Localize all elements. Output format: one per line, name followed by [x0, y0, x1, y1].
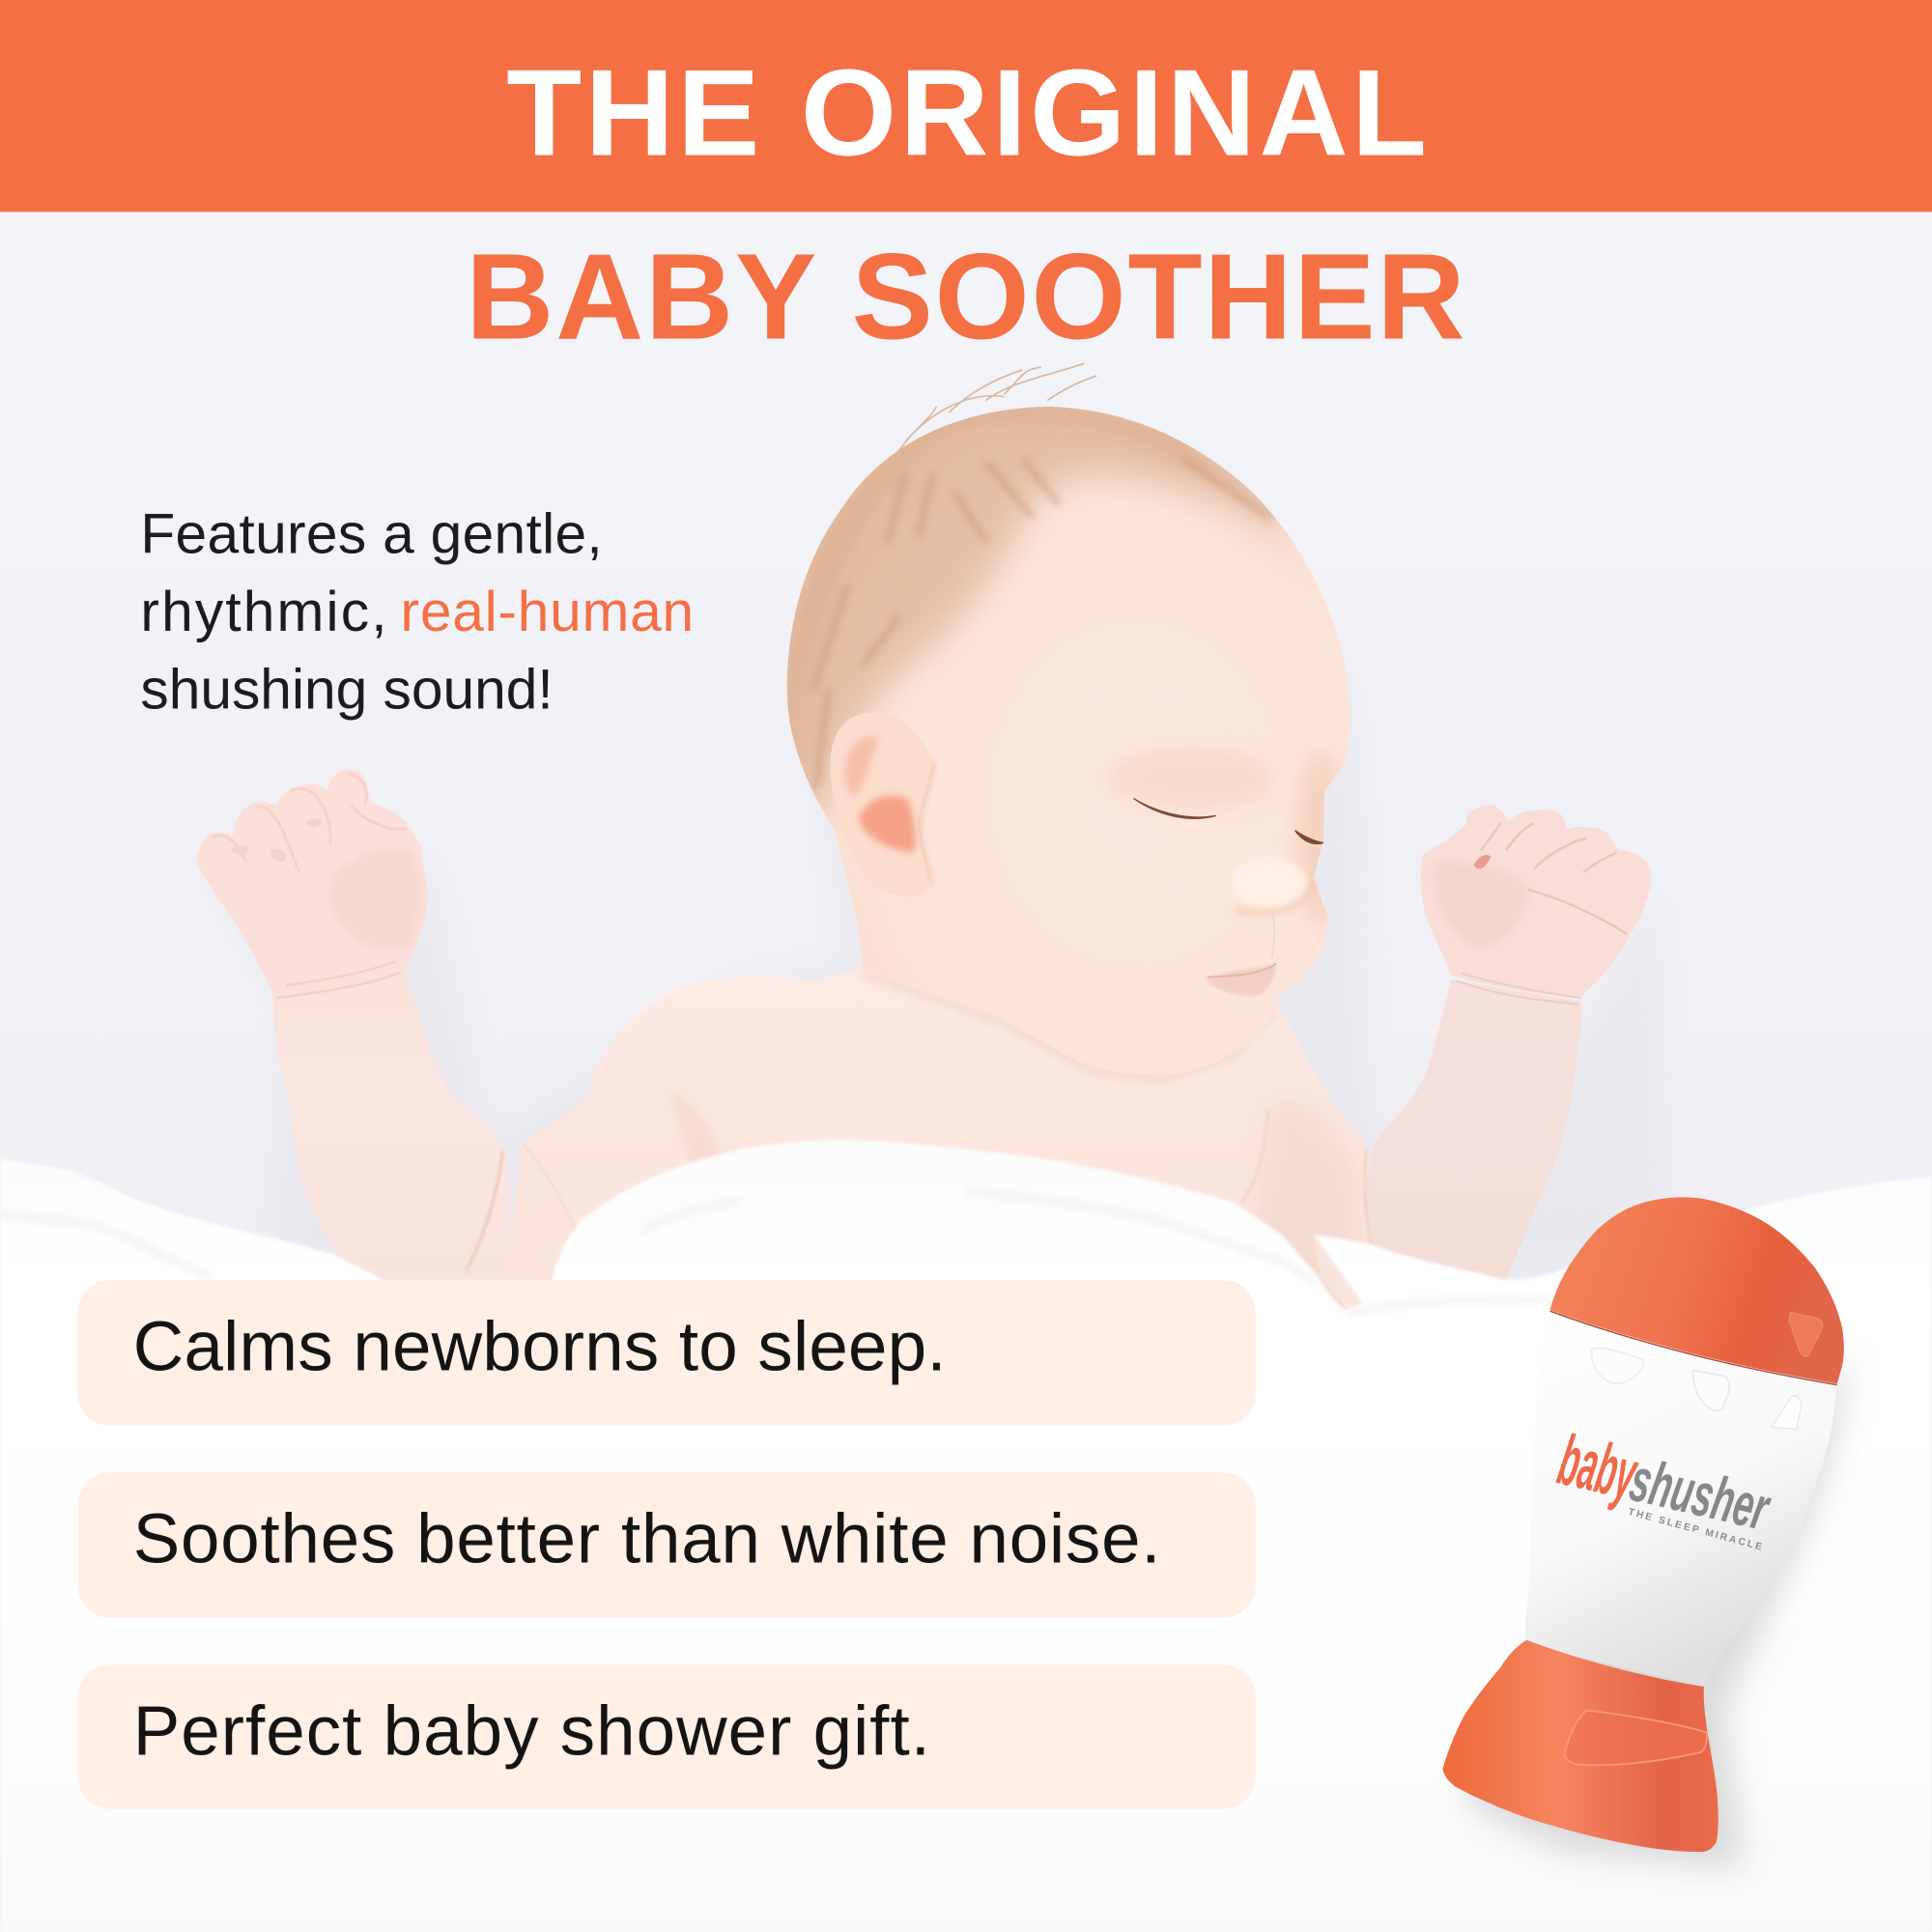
chest and arm crease — [1240, 1112, 1267, 1204]
benefit pill 3 — [77, 1664, 1256, 1808]
head — [770, 363, 1350, 1074]
pill background — [77, 1472, 1256, 1618]
device logo — [1551, 1419, 1779, 1546]
nose highlight — [1233, 858, 1306, 907]
callout line two: rhythmic, — [140, 581, 387, 643]
pill text: Perfect baby shower gift. — [133, 1691, 930, 1770]
eye socket shading — [1105, 747, 1273, 810]
white sheet and blanket — [0, 1140, 1932, 1932]
underarm crease — [670, 1091, 720, 1168]
product drop shadow — [1466, 1355, 1848, 1868]
ear — [831, 713, 933, 897]
dome seam — [1550, 1311, 1837, 1385]
left arm — [272, 971, 510, 1288]
logo tagline: THE SLEEP MIRACLE — [1627, 1507, 1763, 1553]
closed eye left — [1133, 799, 1216, 818]
darker hair streaks — [813, 458, 1269, 788]
ear shadow — [918, 761, 933, 885]
right cheek shading — [1296, 752, 1346, 924]
nose shadow — [1235, 882, 1316, 913]
right shoulder shading — [1244, 1102, 1361, 1319]
benefit pill 1 — [77, 1280, 1256, 1426]
lip line — [1208, 963, 1276, 977]
callout line one: Features a gentle, — [140, 503, 603, 566]
elbow crease — [466, 1151, 502, 1271]
hair wisps — [899, 363, 1096, 450]
pill background — [77, 1664, 1256, 1808]
mouth — [1205, 963, 1276, 996]
right arm crease — [1365, 1149, 1372, 1244]
control button left — [1592, 1349, 1644, 1383]
control button right — [1772, 1396, 1802, 1430]
left hand — [197, 770, 428, 998]
pill text: Calms newborns to sleep. — [133, 1307, 947, 1385]
philtrum — [1271, 909, 1274, 958]
wrist crease — [1457, 974, 1580, 1005]
base recess — [1565, 1710, 1707, 1765]
right hand — [1420, 805, 1652, 1005]
fingers — [212, 774, 407, 872]
palm shading — [1435, 861, 1528, 949]
pill background — [77, 1280, 1256, 1426]
pink inner fold — [1474, 855, 1491, 868]
right arm — [1365, 980, 1581, 1282]
finger tips — [232, 818, 323, 862]
soft shadow behind baby — [210, 537, 1663, 1282]
callout line three: shushing sound! — [140, 658, 554, 721]
ear outer — [831, 713, 933, 897]
hair edge tone — [786, 407, 1281, 746]
fist — [1420, 805, 1652, 998]
pill text: Soothes better than white noise. — [133, 1499, 1161, 1577]
device base — [1443, 1640, 1719, 1852]
logo word shusher: shusher — [1624, 1444, 1777, 1544]
translucent blanket tip — [1314, 1235, 1363, 1310]
finger creases — [1481, 823, 1627, 934]
closed eye right — [1295, 831, 1323, 844]
callout: shushing sound — [140, 503, 694, 721]
palm and fist — [197, 770, 428, 993]
logo word baby: baby — [1551, 1419, 1646, 1515]
palm shading — [329, 850, 420, 950]
dome triangle button — [1789, 1312, 1823, 1356]
hair tone — [770, 370, 1346, 924]
device dome — [1550, 1197, 1844, 1383]
device white body — [1525, 1310, 1837, 1687]
hair mass — [786, 407, 1289, 817]
wrist creases — [276, 961, 401, 998]
upper arm crease — [523, 1144, 579, 1237]
baby illustration — [197, 363, 1652, 1324]
heading line two: BABY SOOTHER — [466, 229, 1465, 365]
product: baby shusher device — [1443, 1197, 1844, 1852]
benefit pill 2 — [77, 1472, 1256, 1618]
blanket fold shading — [0, 1191, 1553, 1314]
ear canal — [859, 796, 916, 853]
body and shoulders — [493, 969, 1373, 1324]
ear helix inner — [845, 736, 877, 799]
header band — [0, 0, 1932, 212]
control button middle — [1693, 1370, 1729, 1410]
heading line one: THE ORIGINAL — [506, 45, 1427, 183]
chin shadow — [863, 974, 1274, 1079]
callout line two: real-human — [401, 581, 694, 643]
head shape — [787, 407, 1350, 1074]
